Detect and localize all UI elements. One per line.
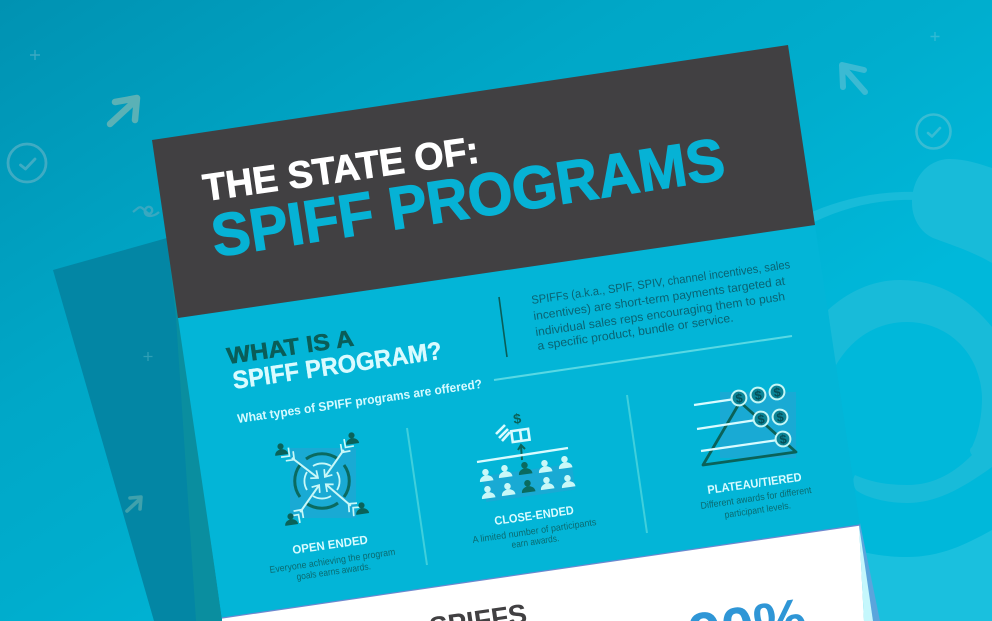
description: plateau tiered: participant levels. — [724, 500, 792, 521]
icon: close ended participants — [477, 410, 575, 502]
label: plateau tiered: PLATEAU/TIERED — [706, 470, 803, 497]
icon: arrow top right — [842, 65, 865, 92]
text block: definition — [530, 257, 791, 353]
tier lines — [694, 399, 778, 451]
description: open ended: Everyone achieving the program — [269, 547, 396, 576]
icon: plateau tiered pyramid — [694, 384, 796, 465]
panel: blue section — [178, 225, 860, 618]
panel: dark header — [152, 45, 815, 318]
description: close ended: A limited number of participants — [472, 517, 597, 546]
icon: check circle left — [8, 144, 46, 182]
icon: plus top left — [30, 50, 40, 60]
description: open ended: goals earns awards. — [296, 561, 372, 583]
description: close ended: earn awards. — [511, 533, 560, 551]
icon: close ended participants: $ — [512, 410, 522, 427]
text block: definition: SPIFFs (a.k.a., SPIF, SPIV, channel incentives, sales — [530, 257, 791, 307]
heading: what is a: WHAT IS A — [225, 325, 355, 369]
text block: definition: incentives) are short-term payments targeted at — [532, 274, 787, 323]
icon: open ended target — [274, 431, 369, 526]
icon: small arrow on back sheet — [127, 497, 141, 511]
icon: check circle right — [916, 114, 950, 148]
text block: definition: individual sales reps encouraging them to push — [534, 289, 786, 339]
background logo shape — [812, 159, 992, 621]
title: spiff programs: SPIFF PROGRAMS — [207, 125, 729, 270]
icon: plus on back sheet — [144, 352, 152, 361]
back sheet shadow — [53, 238, 222, 621]
label: close ended: CLOSE-ENDED — [493, 503, 575, 528]
icon: plus top right — [930, 32, 940, 41]
horizontal divider — [494, 336, 792, 380]
panel: white section — [222, 525, 864, 621]
description: plateau tiered: Different awards for different — [700, 485, 813, 512]
text block: definition: a specific product, bundle or service. — [536, 311, 734, 353]
icon: squiggle — [133, 207, 159, 216]
dollar coins — [731, 384, 791, 447]
vertical divider: heading — [499, 297, 507, 357]
panel edge line — [222, 525, 860, 618]
description: plateau tiered — [700, 485, 813, 521]
pyramid — [703, 402, 796, 465]
vertical divider: column 1 — [407, 428, 427, 565]
heading: spiff program: SPIFF PROGRAM? — [231, 337, 444, 395]
title: the state of: THE STATE OF: — [200, 130, 482, 210]
vertical divider: column 2 — [627, 395, 647, 533]
panel edge strip right — [858, 523, 880, 621]
label: open ended: OPEN ENDED — [291, 532, 369, 557]
icon: arrow top left — [110, 98, 137, 124]
hand and gift box — [496, 425, 530, 442]
subheading: program types: What types of SPIFF programs are offered? — [236, 377, 483, 426]
